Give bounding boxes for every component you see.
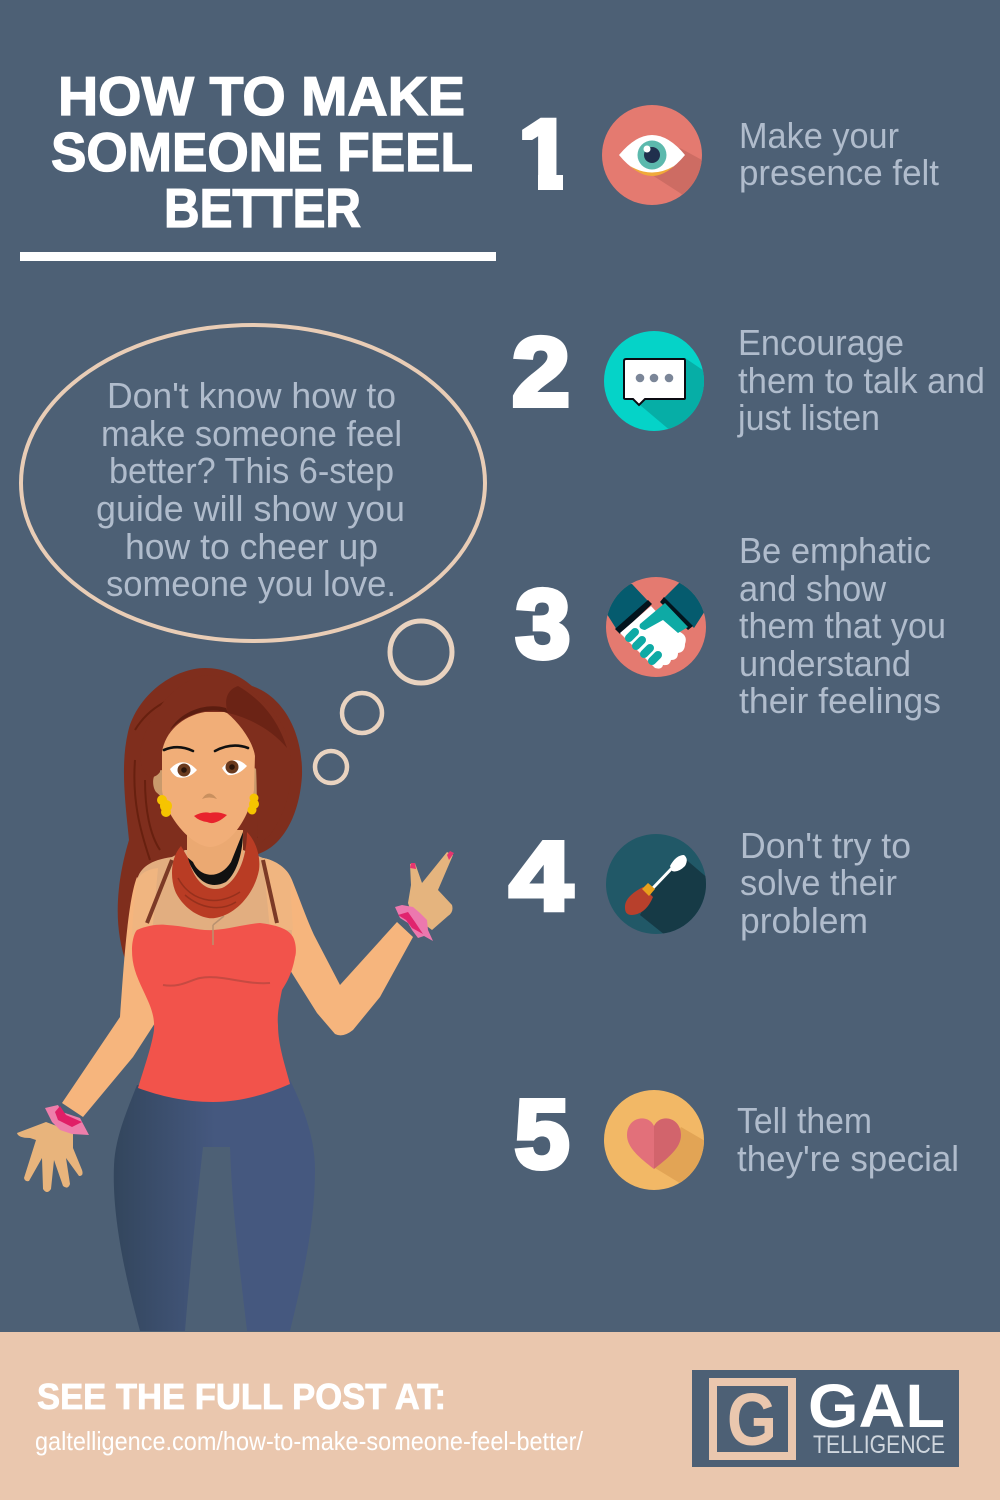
title: SOMEONE FEEL: [51, 121, 473, 183]
step 3 text: Be emphatic: [739, 530, 931, 571]
step 5 icon: heart: [604, 1090, 704, 1190]
jeans: [114, 1080, 315, 1331]
step 4 text: [740, 825, 911, 941]
hair front: [140, 675, 291, 845]
scarf: [172, 832, 259, 918]
footer url: galtelligence.com/how-to-make-someone-feel-better/: [35, 1426, 584, 1456]
step 2 number: 2: [512, 318, 570, 426]
step 4 number: 4: [510, 822, 573, 930]
left arm: [62, 877, 170, 1117]
ears: [153, 768, 262, 800]
step 1 text: Make your: [739, 115, 899, 156]
title: BETTER: [164, 177, 361, 239]
thought bubble with intro text: Don't know how to: [107, 375, 396, 416]
illustration: woman pointing: [17, 668, 454, 1331]
scarf folds: [178, 878, 240, 908]
step 3 text: and show: [739, 568, 887, 609]
step 2 text: just listen: [737, 397, 880, 438]
step 4 icon: screwdriver: [606, 834, 706, 934]
thought bubble trail: [315, 621, 452, 783]
step 5 number: 5: [514, 1080, 570, 1188]
neck: [187, 830, 243, 884]
footer heading: SEE THE FULL POST AT:: [37, 1376, 446, 1417]
nose: [202, 794, 217, 799]
hair strands: [134, 692, 281, 860]
step 3 text: them that you: [739, 605, 946, 646]
step 4 text: solve their: [740, 862, 897, 903]
step 1 text: [739, 115, 939, 193]
logo: TELLIGENCE: [813, 1431, 945, 1459]
thought bubble with intro text: make someone feel: [101, 413, 402, 454]
logo: G: [727, 1378, 777, 1461]
logo: [692, 1370, 959, 1467]
step 5 text: they're special: [737, 1138, 959, 1179]
mouth: [194, 812, 227, 823]
torso skin: [134, 850, 292, 935]
thought bubble with intro text: how to cheer up: [125, 526, 378, 567]
step 2 text: [737, 322, 985, 438]
coral top: [132, 923, 296, 1102]
top seam: [163, 977, 270, 986]
step 4 text: problem: [740, 900, 868, 941]
eyes: [170, 762, 197, 778]
straps: [147, 860, 277, 923]
face: [162, 712, 255, 847]
step 3 text: [739, 530, 946, 721]
right bracelet: [395, 905, 433, 941]
step 3 text: their feelings: [739, 680, 941, 721]
thought bubble with intro text: [21, 325, 485, 641]
scarf shadow: [187, 832, 243, 885]
left hand: [17, 1122, 83, 1192]
thought bubble with intro text: someone you love.: [106, 563, 396, 604]
necklace: [213, 916, 224, 945]
step 5 text: Tell them: [737, 1100, 872, 1141]
eyebrows: [164, 746, 248, 751]
title: [51, 65, 473, 239]
logo: GAL: [808, 1372, 945, 1440]
step 2 icon: speech bubble: [604, 331, 704, 431]
step 3 number: 3: [516, 570, 570, 678]
right arm: [263, 858, 413, 1035]
footer band: [0, 1332, 1000, 1500]
step 1 number: 1: [518, 100, 572, 208]
hair back: [118, 668, 302, 965]
step 1 text: presence felt: [739, 152, 939, 193]
step 2 text: Encourage: [738, 322, 904, 363]
title: HOW TO MAKE: [58, 65, 465, 127]
left bracelet: [45, 1105, 89, 1135]
step 1 icon: eye: [602, 105, 702, 210]
step 3 text: understand: [739, 643, 911, 684]
thought bubble with intro text: guide will show you: [96, 488, 405, 529]
step 3 icon: handshake: [606, 577, 706, 677]
earrings: [157, 794, 259, 817]
thought bubble with intro text: better? This 6-step: [109, 450, 394, 491]
right hand: [408, 852, 453, 930]
step 4 text: Don't try to: [740, 825, 911, 866]
step 2 text: them to talk and: [738, 360, 985, 401]
step 5 text: [737, 1100, 959, 1179]
